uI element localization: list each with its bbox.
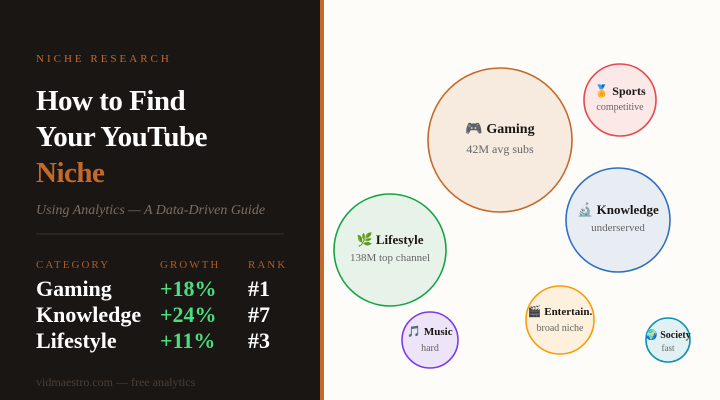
table header: category: CATEGORY (36, 259, 110, 271)
table column: growth values: +24% (160, 302, 217, 327)
bubble: Lifestyle (333, 193, 447, 307)
subtitle: Using Analytics — A Data-Driven Guide (36, 203, 265, 218)
bubble: Sports: competitive (596, 102, 644, 113)
table column: ranks: #3 (248, 328, 270, 353)
bubble: Gaming (427, 67, 573, 213)
title: Niche (36, 157, 104, 189)
table column: category names: Lifestyle (36, 328, 117, 353)
bubble: Sports (583, 63, 657, 137)
table column: growth values: +11% (160, 328, 215, 353)
bubble: Lifestyle: 138M top channel (350, 252, 430, 264)
footer note: vidmaestro.com — free analytics (36, 375, 195, 389)
bubble: Entertainment: 🎬 Entertain. (528, 306, 592, 318)
table header: rank: RANK (248, 259, 287, 271)
bubble: Knowledge: 🔬 Knowledge (577, 202, 659, 217)
bubble: Knowledge (565, 167, 671, 273)
table column: ranks: #1 (248, 276, 270, 301)
table column: growth values: +18% (160, 276, 217, 301)
eyebrow label: NICHE RESEARCH (36, 53, 172, 65)
bubble: Gaming: 42M avg subs (466, 142, 534, 156)
bubble: Entertainment: broad niche (537, 323, 583, 334)
table column: growth values (160, 276, 217, 353)
table header: growth: GROWTH (160, 259, 220, 271)
bubble: Gaming: 🎮 Gaming (465, 122, 535, 137)
bubble: Music: 🎵 Music (407, 326, 453, 338)
bubble: Entertainment (525, 285, 595, 355)
table column: category names: Knowledge (36, 302, 141, 327)
bubble: Society (645, 317, 691, 363)
title (36, 85, 207, 189)
table column: category names: Gaming (36, 276, 112, 301)
bubble: Society: fast (662, 342, 674, 352)
title: Your YouTube (36, 121, 207, 153)
table column: ranks (248, 276, 270, 353)
bubble: Lifestyle: 🌿 Lifestyle (356, 232, 424, 247)
bubble: Knowledge: underserved (591, 222, 645, 234)
panel: left sidebar (0, 0, 324, 400)
title: How to Find (36, 85, 185, 117)
table column: ranks: #7 (248, 302, 270, 327)
bubble: Sports: 🏅 Sports (594, 84, 646, 98)
table column: category names (36, 276, 141, 353)
bubble: Society: 🌍 Society (645, 330, 691, 340)
bubble: Music: hard (421, 343, 439, 354)
bubble: Music (401, 311, 459, 369)
